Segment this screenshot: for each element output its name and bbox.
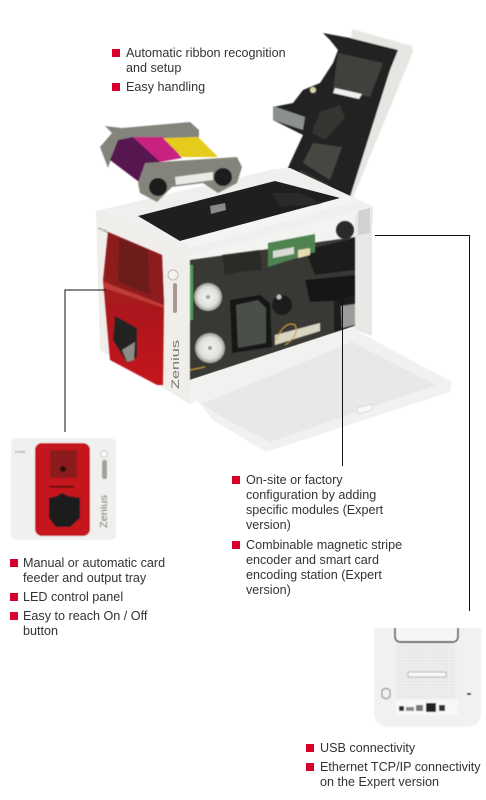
callout: front panel features: LED control panel <box>23 590 123 604</box>
brand name: Zenius <box>170 339 182 389</box>
callout: front panel features: Easy to reach On / Off <box>23 609 147 623</box>
front door, opened <box>190 330 452 452</box>
leader line: front panel <box>65 290 106 432</box>
callout: module features: encoder and smart card <box>246 553 379 567</box>
callout: ribbon features: Easy handling <box>126 80 205 94</box>
front view thumbnail: Zenius <box>99 495 110 528</box>
callout: module features: Combinable magnetic stripe <box>246 538 402 552</box>
front view thumbnail <box>11 438 116 540</box>
callout: module features <box>232 473 402 597</box>
leader line: rear connectivity <box>375 236 470 611</box>
callout: module features: version) <box>246 583 291 597</box>
callout: ribbon features <box>112 46 286 94</box>
leader line: modules <box>342 298 344 466</box>
callout: module features: On-site or factory <box>246 473 343 487</box>
rear view thumbnail <box>374 628 481 727</box>
callout: connectivity features: USB connectivity <box>320 741 415 755</box>
callout: module features: version) <box>246 518 291 532</box>
callout: connectivity features: Ethernet TCP/IP connectivity <box>320 760 481 774</box>
callout: module features: encoding station (Expert <box>246 568 382 582</box>
callout: module features: configuration by adding <box>246 488 376 502</box>
small logo: evolis <box>98 225 109 234</box>
printer body <box>96 169 372 404</box>
callout: front panel features: button <box>23 624 58 638</box>
callout: module features: specific modules (Expert <box>246 503 383 517</box>
interior <box>190 221 355 380</box>
front face <box>190 207 372 404</box>
callout: connectivity features: on the Expert version <box>320 775 439 789</box>
LED panel and power button <box>168 270 178 313</box>
printer cover, opened <box>273 29 413 205</box>
callout: front panel features: feeder and output tray <box>23 571 146 585</box>
callout: front panel features: Manual or automatic card <box>23 556 165 570</box>
ribbon cartridge <box>100 122 242 202</box>
callout: ribbon features: Automatic ribbon recognition <box>126 46 286 60</box>
red front panel <box>103 232 164 385</box>
front view thumbnail: evolis <box>15 449 25 454</box>
top surface <box>96 169 372 258</box>
left face <box>96 212 190 404</box>
callout: ribbon features: and setup <box>126 61 181 75</box>
callout: connectivity features <box>306 741 481 789</box>
callout: front panel features <box>10 556 165 638</box>
